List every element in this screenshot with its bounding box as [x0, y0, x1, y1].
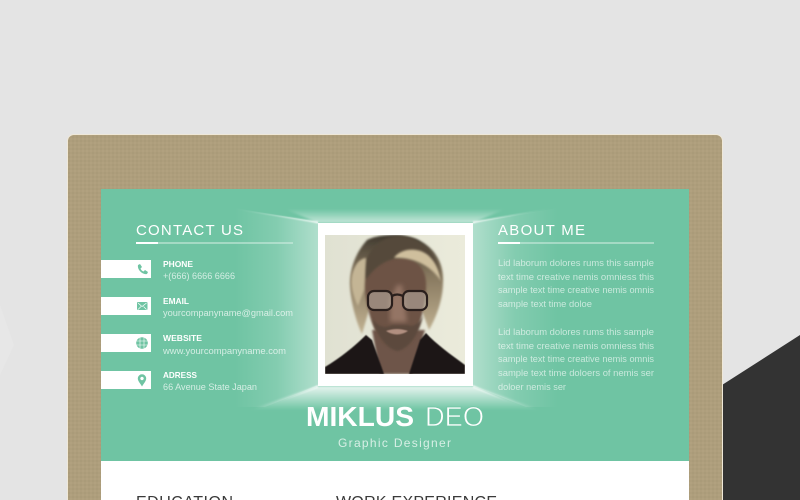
glow: top [292, 210, 498, 224]
icon: envelope [137, 302, 148, 310]
panel: green header [101, 189, 689, 461]
name: MIKLUS [306, 401, 414, 432]
hair back [350, 235, 443, 334]
hair highlight [394, 250, 441, 282]
photo frame [318, 223, 473, 386]
light streaks [254, 212, 532, 398]
name [306, 401, 484, 432]
contact: phone: PHONE [163, 259, 193, 269]
face [364, 259, 427, 332]
beard [372, 315, 423, 351]
icon: phone [138, 264, 148, 274]
contact: email: yourcompanyname@gmail.com [163, 308, 293, 318]
contact: email: EMAIL [163, 296, 189, 306]
contact: phone [101, 259, 235, 281]
icon: globe [136, 337, 148, 349]
chest and neck [372, 330, 425, 374]
dark corner shape [722, 335, 800, 500]
name: DEO [425, 401, 484, 432]
contact: website [101, 333, 286, 356]
glow: bottom [250, 386, 540, 410]
face highlights [390, 285, 407, 322]
text block: about paragraph 2: Lid laborum dolores rums this sample [498, 327, 654, 337]
hair front [365, 236, 441, 282]
contact: website: www.yourcompanyname.com [162, 346, 286, 356]
contact: address: ADRESS [163, 370, 197, 380]
glasses [368, 291, 427, 310]
contact: phone: +(666) 6666 6666 [163, 271, 235, 281]
board [67, 134, 723, 500]
lips [386, 329, 408, 334]
contact: website: WEBSITE [163, 333, 202, 343]
text block: about paragraph 1: sample text time doloe [498, 299, 592, 309]
portrait [325, 235, 465, 374]
text block: about paragraph 2: sample text time doloers of nemis ser [498, 368, 654, 378]
jacket [325, 333, 465, 374]
text block: about paragraph 2: text time creative nemis omniess this [498, 341, 655, 351]
contact: address [101, 370, 257, 392]
heading: contact us: CONTACT US [136, 222, 243, 239]
glow: left [252, 211, 318, 407]
job title: Graphic Designer [338, 436, 451, 450]
text block: about paragraph 2 [498, 327, 655, 392]
panel: white lower section [101, 461, 689, 500]
contact: address: 66 Avenue State Japan [163, 382, 257, 392]
text block: about paragraph 2: doloer nemis ser [498, 382, 566, 392]
text block: about paragraph 1: Lid laborum dolores rums this sample [498, 258, 654, 268]
contact: email [101, 296, 293, 318]
decorative faint chevron left [0, 305, 14, 375]
glow: right [473, 212, 540, 407]
text block: about paragraph 1: sample text time creative nemis omnis [498, 285, 655, 295]
icon: map pin [138, 374, 146, 386]
blonde strands left [351, 258, 366, 306]
heading: about me: ABOUT ME [498, 222, 585, 239]
text block: about paragraph 1 [498, 258, 655, 309]
text block: about paragraph 2: sample text time creative nemis omnis [498, 354, 655, 364]
text block: about paragraph 1: text time creative nemis omniess this [498, 272, 655, 282]
